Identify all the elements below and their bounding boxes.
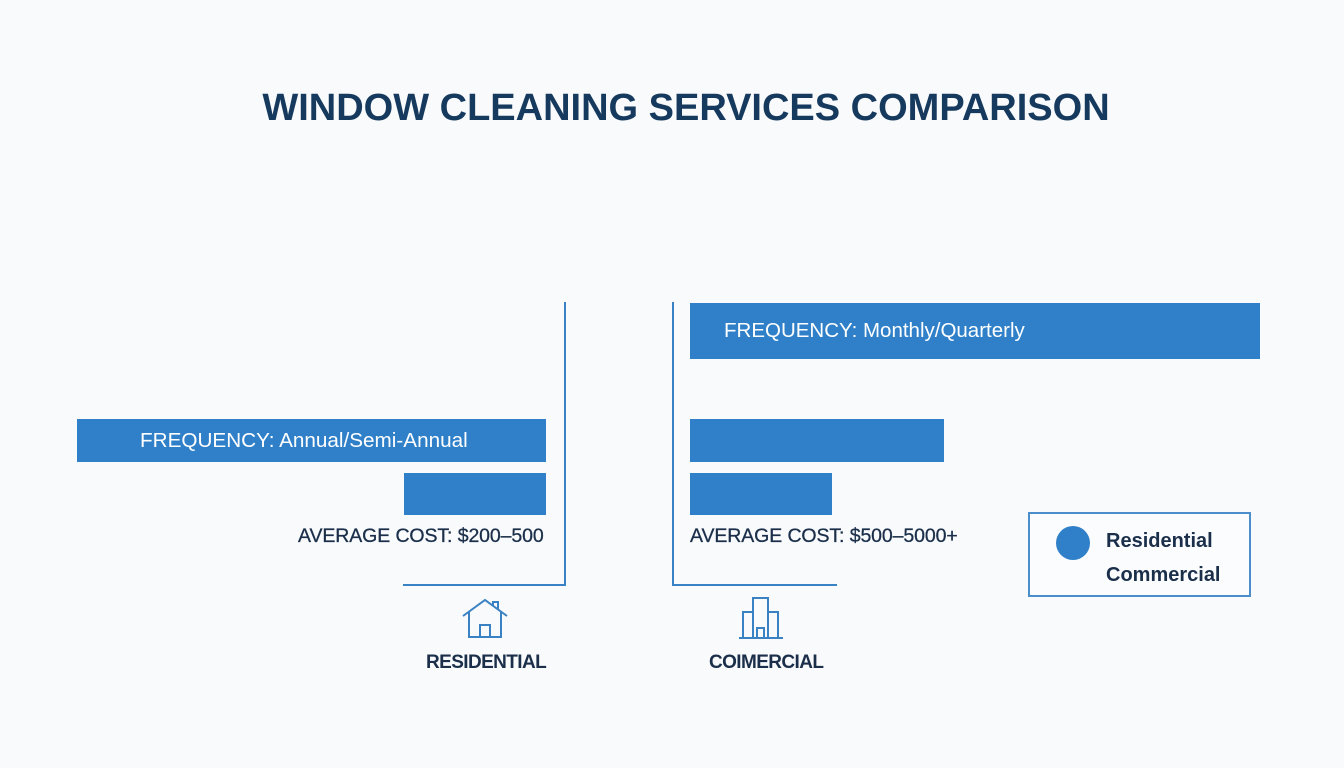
residential cost label: AVERAGE COST: $200–500 (298, 525, 544, 547)
commercial cost bar (690, 473, 832, 515)
residential frequency bar: FREQUENCY: Annual/Semi-Annual (140, 429, 468, 452)
legend text: Commercial (1106, 564, 1220, 586)
icon: house (462, 598, 508, 638)
commercial bar 2 (690, 419, 944, 462)
legend text: Residential (1106, 530, 1213, 552)
icon: building (739, 597, 783, 639)
commercial frequency bar: FREQUENCY: Monthly/Quarterly (724, 319, 1025, 342)
residential axis (403, 302, 566, 586)
commercial label: COIMERCIAL (709, 652, 823, 673)
commercial axis (672, 302, 837, 586)
commercial frequency bar (690, 303, 1260, 359)
title: WINDOW CLEANING SERVICES COMPARISON (262, 87, 1110, 129)
legend (1028, 512, 1251, 597)
legend icon (1056, 526, 1090, 560)
commercial cost label: AVERAGE COST: $500–5000+ (690, 525, 958, 547)
legend text (1106, 530, 1220, 586)
residential label: RESIDENTIAL (426, 652, 546, 673)
residential cost bar (404, 473, 546, 515)
residential frequency bar (77, 419, 546, 462)
